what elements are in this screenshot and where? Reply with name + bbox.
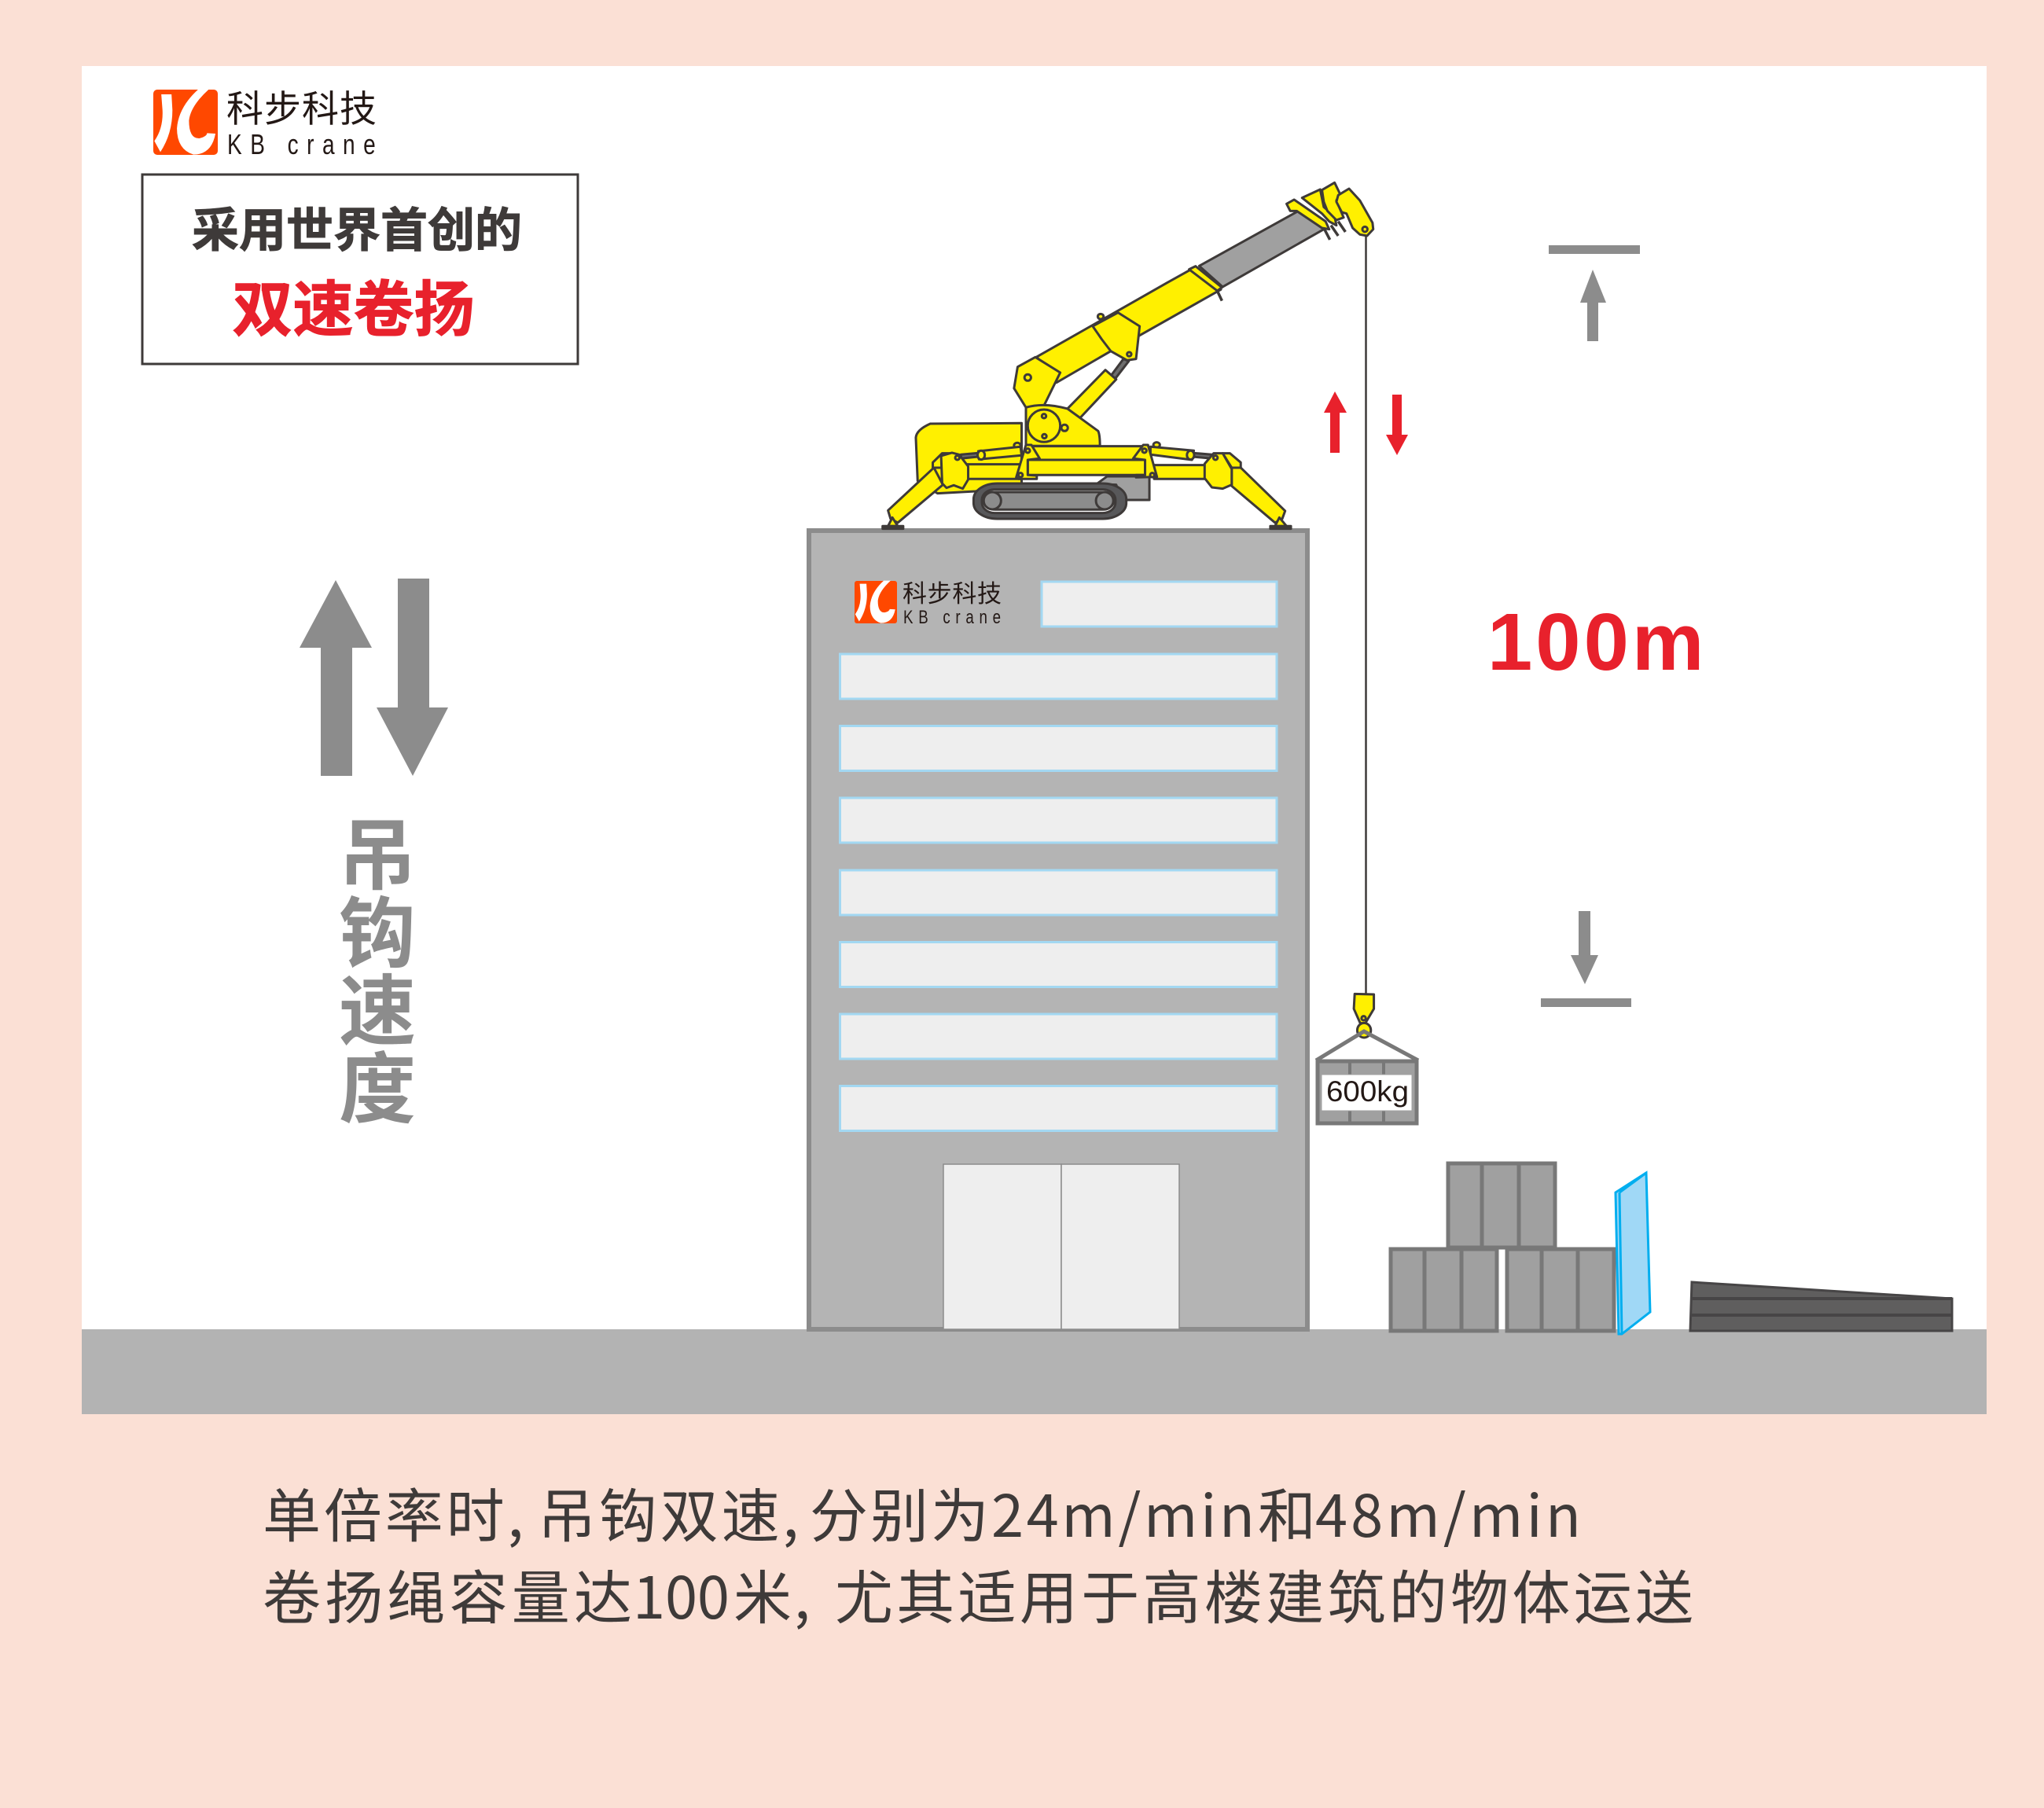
building windows: [840, 582, 1277, 1130]
stacked crates: [1391, 1163, 1614, 1331]
crate right: [1507, 1249, 1614, 1331]
caption line 2: 卷扬绳容量达: [263, 1552, 632, 1636]
caption line 1: [263, 1470, 1581, 1554]
height label: 100m: 100m: [1487, 597, 1707, 687]
crane telescopic boom: [1014, 211, 1324, 418]
caption line 1: 24m/min: [991, 1470, 1255, 1554]
building doors: [943, 1164, 1179, 1329]
crate left: [1391, 1249, 1497, 1331]
building logo: 科步科技: [903, 574, 1002, 609]
hook block: [1354, 994, 1374, 1038]
steel plates: [1690, 1282, 1952, 1331]
caption line 2: ,: [794, 1552, 811, 1636]
crane turret: [1026, 405, 1100, 446]
crate top: [1448, 1163, 1555, 1248]
vertical label: hook speed: 钩: [339, 872, 416, 983]
crane feet: [883, 517, 1291, 529]
caption line 1: 吊钩双速,: [538, 1470, 799, 1554]
ground: [82, 1329, 1987, 1414]
building logo: KB crane: [903, 607, 1001, 628]
caption line 2: 100: [633, 1552, 730, 1636]
caption line 2: 米: [733, 1552, 792, 1636]
caption text: [263, 1470, 1693, 1636]
caption line 2: [263, 1552, 1693, 1636]
glass panel: [1616, 1173, 1650, 1334]
crane boom tip: [1287, 182, 1373, 240]
hoist rope: [1365, 236, 1367, 995]
building: [809, 531, 1307, 1329]
crane crawler track: [973, 483, 1127, 519]
caption line 1: 单倍率时,: [263, 1470, 524, 1554]
arrows: hook speed up and down: [300, 579, 448, 776]
crane chassis and outriggers: [888, 443, 1285, 523]
vertical label: hook speed: 吊: [339, 794, 416, 906]
logo: KB crane: KB crane: [227, 129, 376, 160]
title box: [142, 175, 578, 364]
title box: 双速卷扬: [233, 262, 475, 349]
suspended load: 600kg: [1316, 1031, 1418, 1123]
title box: 采用世界首创的: [192, 193, 522, 261]
crane: [883, 182, 1373, 529]
vertical label: hook speed: 速: [339, 950, 416, 1061]
height marker bottom: [1541, 911, 1631, 1007]
caption line 1: 和: [1258, 1470, 1316, 1554]
vertical label: hook speed: [339, 794, 416, 1139]
caption line 1: 48m/min: [1315, 1470, 1581, 1554]
crane rear block: [1097, 476, 1149, 500]
crane counterweight: [916, 423, 1021, 494]
red arrows: hoist direction: [1324, 391, 1408, 455]
caption line 2: 尤其适用于高楼建筑的物体运送: [835, 1552, 1693, 1636]
building logo: [855, 574, 1002, 628]
caption line 1: 分别为: [810, 1470, 989, 1554]
white scene panel: [82, 66, 1987, 1330]
logo: KB crane: [153, 79, 377, 160]
vertical label: hook speed: 度: [339, 1027, 416, 1139]
logo: KB crane: 科步科技: [226, 79, 377, 133]
suspended load: 600kg: 600kg: [1326, 1075, 1409, 1108]
height marker top: [1549, 245, 1640, 341]
